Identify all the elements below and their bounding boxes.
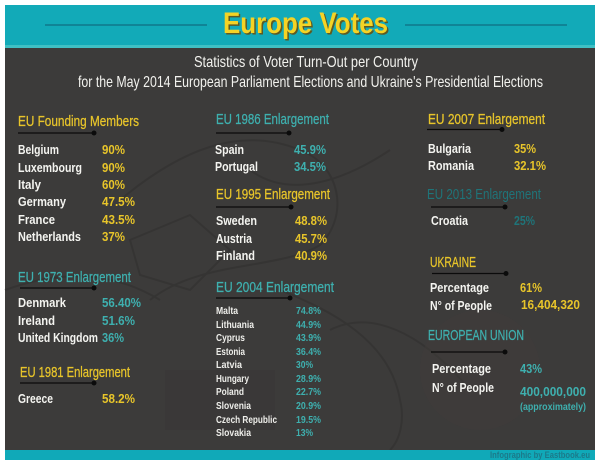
panel: EU 1995 enlargement: 48.8% bbox=[295, 213, 327, 228]
panel: Ukraine: Percentage bbox=[430, 280, 489, 295]
panel: Ukraine: 16,404,320 bbox=[521, 297, 580, 312]
panel: Ukraine bbox=[430, 255, 580, 313]
panel: EU 1986 enlargement: Portugal bbox=[215, 159, 258, 174]
panel: EU 1973 enlargement bbox=[18, 270, 141, 345]
panel: EU founding members: Belgium bbox=[18, 142, 59, 157]
panel: EU 2004 enlargement: Slovakia bbox=[216, 427, 251, 439]
panel: Ukraine: 61% bbox=[520, 280, 542, 295]
panel: European Union bbox=[428, 328, 586, 413]
subtitle bbox=[78, 54, 543, 91]
panel: EU 2004 enlargement: 30% bbox=[296, 359, 314, 371]
panel: EU 2013 enlargement: 25% bbox=[514, 213, 535, 228]
panel: EU founding members: 90% bbox=[102, 160, 125, 175]
panel: EU 2004 enlargement: Poland bbox=[216, 386, 244, 398]
panel: EU 1995 enlargement: Finland bbox=[216, 248, 255, 263]
panel: EU 2013 enlargement bbox=[427, 187, 541, 228]
panel: EU founding members: Italy bbox=[18, 177, 42, 192]
panel: EU 1995 enlargement: Austria bbox=[216, 231, 253, 246]
panel: EU founding members: EU Founding Members bbox=[18, 114, 139, 130]
panel: EU 1981 enlargement: 58.2% bbox=[102, 391, 135, 406]
panel: European Union: 43% bbox=[520, 361, 542, 376]
panel: EU 1986 enlargement: 34.5% bbox=[294, 159, 326, 174]
panel: EU 2013 enlargement: EU 2013 Enlargement bbox=[427, 187, 541, 203]
panel: EU 2004 enlargement: Czech Republic bbox=[216, 414, 277, 426]
panel: EU 2004 enlargement: Latvia bbox=[216, 359, 242, 371]
panel: EU founding members: Luxembourg bbox=[18, 160, 82, 175]
panel: EU 1981 enlargement: Greece bbox=[18, 391, 53, 406]
panel: EU 2004 enlargement: Malta bbox=[216, 305, 238, 317]
title: Europe Votes bbox=[223, 7, 388, 40]
panel: EU 2013 enlargement: Croatia bbox=[431, 213, 469, 228]
panel: EU 1986 enlargement: Spain bbox=[215, 142, 244, 157]
panel: European Union: EUROPEAN UNION bbox=[428, 328, 524, 344]
panel: EU 2004 enlargement: Cyprus bbox=[216, 332, 245, 344]
panel: EU founding members: 60% bbox=[102, 177, 125, 192]
panel: EU 2007 enlargement: Bulgaria bbox=[428, 141, 472, 156]
panel: EU 2007 enlargement: EU 2007 Enlargement bbox=[428, 112, 545, 128]
panel: EU 2004 enlargement: EU 2004 Enlargement bbox=[216, 280, 334, 296]
panel: EU 1973 enlargement: 51.6% bbox=[102, 313, 135, 328]
panel: EU 2004 enlargement: Slovenia bbox=[216, 400, 251, 412]
panel: EU 2004 enlargement: 20.9% bbox=[296, 400, 322, 412]
panel: EU founding members bbox=[18, 114, 139, 244]
panel: title banner bbox=[5, 5, 595, 48]
panel: EU 2007 enlargement: Romania bbox=[428, 158, 475, 173]
panel: EU 1995 enlargement: Sweden bbox=[216, 213, 257, 228]
panel: EU founding members: Netherlands bbox=[18, 229, 81, 244]
panel: EU 2004 enlargement: Estonia bbox=[216, 346, 245, 358]
panel: EU founding members: 90% bbox=[102, 142, 125, 157]
panel: EU 2004 enlargement bbox=[216, 280, 334, 439]
panel: EU 2007 enlargement bbox=[427, 112, 546, 173]
panel: EU founding members: 37% bbox=[102, 229, 125, 244]
panel: European Union: (approximately) bbox=[520, 401, 586, 413]
panel: Ukraine: N° of People bbox=[430, 298, 492, 313]
panel: EU 1995 enlargement: EU 1995 Enlargement bbox=[216, 187, 330, 203]
panel: EU 2007 enlargement: 32.1% bbox=[514, 158, 546, 173]
panel: EU 1995 enlargement bbox=[216, 187, 330, 263]
panel: EU 2004 enlargement: 22.7% bbox=[296, 386, 322, 398]
panel: EU 1995 enlargement: 40.9% bbox=[295, 248, 327, 263]
panel: EU 2004 enlargement: 43.9% bbox=[296, 332, 322, 344]
panel: EU 2004 enlargement: 44.9% bbox=[296, 319, 322, 331]
footer band with credit bbox=[5, 450, 595, 460]
panel: EU 1995 enlargement: 45.7% bbox=[295, 231, 327, 246]
panel: Ukraine: UKRAINE bbox=[430, 255, 476, 271]
panel: EU founding members: 47.5% bbox=[102, 194, 135, 209]
panel: EU 1986 enlargement: EU 1986 Enlargement bbox=[216, 112, 329, 128]
panel: EU 2004 enlargement: 13% bbox=[296, 427, 314, 439]
panel: EU 1973 enlargement: 36% bbox=[102, 330, 124, 345]
panel: EU 1973 enlargement: Denmark bbox=[18, 295, 67, 310]
panel: EU founding members: 43.5% bbox=[102, 212, 135, 227]
panel: EU 2004 enlargement: 74.8% bbox=[296, 305, 322, 317]
panel: EU 1986 enlargement bbox=[215, 112, 329, 174]
title shadow: Europe Votes bbox=[224, 8, 390, 42]
panel: EU 1973 enlargement: EU 1973 Enlargement bbox=[18, 270, 131, 286]
subtitle: Statistics of Voter Turn-Out per Country bbox=[194, 54, 418, 71]
panel: EU founding members: France bbox=[18, 212, 55, 227]
panel: EU 1973 enlargement: 56.40% bbox=[102, 295, 141, 310]
panel: EU 1981 enlargement bbox=[18, 365, 135, 406]
panel: EU 1986 enlargement: 45.9% bbox=[294, 142, 326, 157]
panel: EU 2004 enlargement: 36.4% bbox=[296, 346, 322, 358]
panel: European Union: 400,000,000 bbox=[520, 384, 586, 399]
panel: EU 2007 enlargement: 35% bbox=[514, 141, 536, 156]
panel: EU 2004 enlargement: 28.9% bbox=[296, 373, 322, 385]
panel: EU 1973 enlargement: Ireland bbox=[18, 313, 55, 328]
panel: EU 1981 enlargement: EU 1981 Enlargement bbox=[20, 365, 130, 381]
panel: EU founding members: Germany bbox=[18, 194, 67, 209]
panel: European Union: Percentage bbox=[432, 361, 491, 376]
panel: EU 2004 enlargement: Lithuania bbox=[216, 319, 254, 331]
panel: European Union: N° of People bbox=[432, 380, 494, 395]
panel: EU 2004 enlargement: Hungary bbox=[216, 373, 249, 385]
panel: EU 2004 enlargement: 19.5% bbox=[296, 414, 322, 426]
panel: EU 1973 enlargement: United Kingdom bbox=[18, 330, 98, 345]
